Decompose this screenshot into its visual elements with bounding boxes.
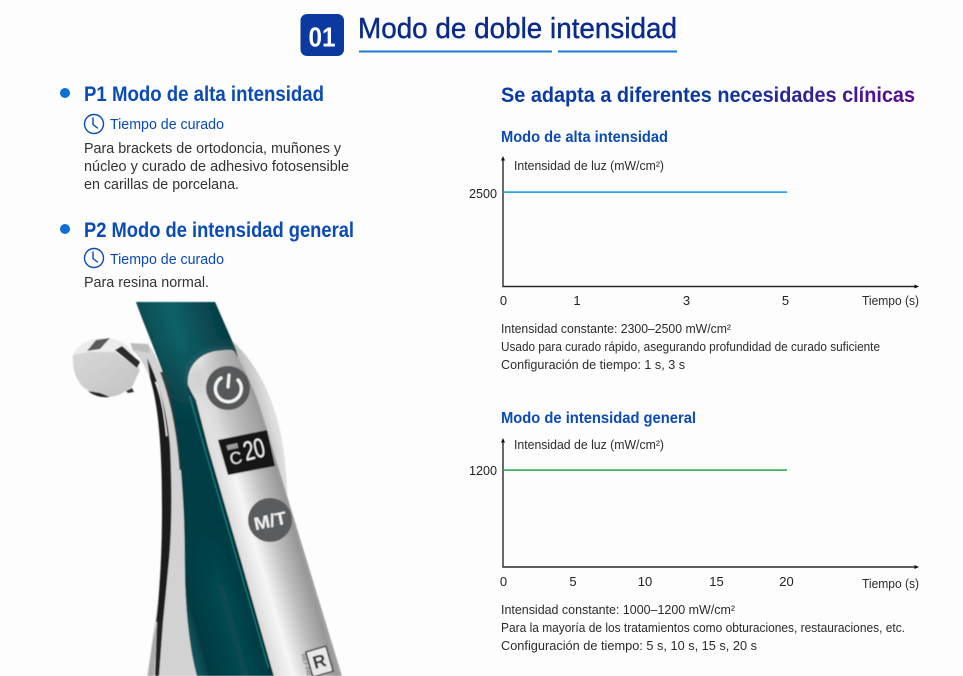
icon: clock P2 bbox=[84, 248, 104, 268]
chart notes bbox=[501, 602, 905, 653]
text: P1 description: Para brackets de ortodoncia, muñones y bbox=[84, 141, 342, 157]
text: P1 description: núcleo y curado de adhesivo fotosensible bbox=[84, 159, 349, 175]
bullet P1 bbox=[60, 88, 70, 98]
teal handle top sheen bbox=[136, 302, 233, 420]
rear silver fin bbox=[225, 340, 287, 495]
chart heading: Modo de alta intensidad bbox=[501, 129, 668, 146]
title badge: 01: 01 bbox=[308, 22, 336, 52]
brand logo bbox=[299, 646, 333, 676]
text: P1 description bbox=[84, 141, 349, 193]
display screen bbox=[218, 430, 275, 475]
x axis ticks: 20 bbox=[779, 574, 794, 589]
plate edge line bbox=[188, 388, 273, 676]
heading: adapts to clinical needs: Se adapta a diferentes necesidades clínicas bbox=[501, 84, 915, 107]
teal handle lower sheen bbox=[184, 526, 252, 676]
plate shading around buttons bbox=[190, 350, 276, 470]
title badge: 01 bbox=[300, 14, 344, 56]
teal accent line bbox=[190, 396, 268, 668]
stand neck bbox=[130, 343, 200, 676]
x axis ticks: 0 bbox=[500, 293, 507, 308]
x axis ticks: 15 bbox=[709, 574, 724, 589]
x axis ticks: 1 bbox=[573, 293, 581, 308]
label: curing time P2: Tiempo de curado bbox=[110, 252, 224, 268]
panel: P2 general intensity description bbox=[60, 219, 354, 291]
power button bbox=[206, 366, 250, 410]
heading P2: P2 Modo de intensidad general bbox=[84, 219, 354, 242]
chart heading: Modo de intensidad general bbox=[501, 410, 696, 427]
x axis ticks bbox=[500, 293, 789, 308]
chart axes bbox=[501, 438, 919, 569]
text: P1 description: en carillas de porcelana. bbox=[84, 177, 239, 193]
x axis ticks: 5 bbox=[782, 293, 789, 308]
chart notes: Configuración de tiempo: 5 s, 10 s, 15 s, 20 s bbox=[501, 638, 757, 653]
M/T button: M/T bbox=[252, 508, 288, 534]
panel: general intensity chart bbox=[469, 410, 919, 653]
x axis ticks: 3 bbox=[683, 293, 690, 308]
x axis ticks: 10 bbox=[638, 574, 652, 589]
x axis label: Tiempo (s) bbox=[862, 576, 919, 591]
display screen: C bbox=[228, 448, 244, 469]
chart notes: Intensidad constante: 1000–1200 mW/cm² bbox=[501, 602, 736, 617]
x axis label: Tiempo (s) bbox=[862, 293, 919, 308]
data line 1200 bbox=[503, 469, 787, 471]
panel: P1 high intensity description bbox=[60, 83, 349, 193]
data line 2500 bbox=[503, 191, 787, 193]
M/T button bbox=[248, 498, 292, 542]
illustration: curing light device bbox=[73, 302, 342, 676]
chart notes bbox=[501, 321, 880, 372]
mirror disc bbox=[73, 338, 140, 397]
silver button plate bbox=[188, 350, 342, 676]
text: P2 description: Para resina normal. bbox=[84, 275, 209, 291]
chart notes: Para la mayoría de los tratamientos como obturaciones, restauraciones, etc. bbox=[501, 620, 905, 635]
chart notes: Configuración de tiempo: 1 s, 3 s bbox=[501, 357, 685, 372]
heading P1: P1 Modo de alta intensidad bbox=[84, 83, 324, 106]
bullet P2 bbox=[60, 224, 70, 234]
value label 2500: 2500 bbox=[469, 186, 497, 201]
teal handle body bbox=[136, 302, 290, 676]
chart notes: Usado para curado rápido, asegurando profundidad de curado suficiente bbox=[501, 339, 880, 354]
y axis label: Intensidad de luz (mW/cm²) bbox=[514, 158, 664, 173]
icon: clock P1 bbox=[84, 114, 104, 134]
chart notes: Intensidad constante: 2300–2500 mW/cm² bbox=[501, 321, 732, 336]
title: Modo de doble intensidad: Modo de doble intensidad bbox=[358, 13, 677, 45]
panel: high intensity chart bbox=[469, 129, 919, 372]
brand logo: R bbox=[310, 650, 328, 673]
chart axes bbox=[501, 156, 919, 288]
value label 1200: 1200 bbox=[469, 463, 497, 478]
x axis ticks: 5 bbox=[569, 574, 577, 589]
label: curing time P1: Tiempo de curado bbox=[110, 117, 224, 133]
x axis ticks: 0 bbox=[500, 574, 507, 589]
x axis ticks bbox=[500, 574, 794, 589]
display screen: 20 bbox=[240, 432, 268, 467]
y axis label: Intensidad de luz (mW/cm²) bbox=[514, 437, 664, 452]
